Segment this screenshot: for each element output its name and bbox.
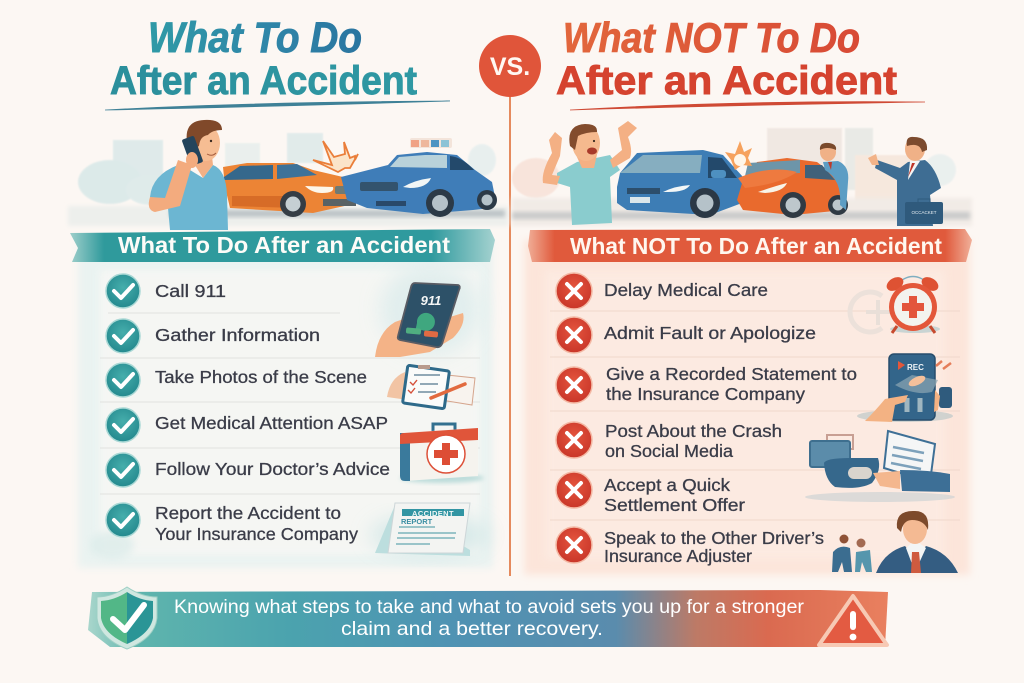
item: get medical attention (106, 408, 388, 442)
icon: accident report: REPORT (401, 517, 433, 526)
scene: driver calling after collision (68, 120, 508, 230)
row dividers (100, 311, 960, 520)
scene: what not to do at the crash (512, 121, 972, 226)
title: what not to do: After an Accident (556, 59, 897, 103)
big adjuster with briefcase (868, 137, 943, 226)
checklist: what not to do (556, 273, 857, 566)
icon: hand recording on phone: REC (907, 363, 924, 372)
item: admit fault: Admit Fault or Apologize (604, 323, 816, 343)
man throwing hands up (543, 121, 637, 225)
footer text (174, 596, 805, 640)
crash starburst (313, 141, 358, 172)
item: report the accident: Report the Accident to (155, 503, 341, 523)
item: recorded statement (556, 364, 857, 404)
item: other driver's adjuster: Speak to the Other Driver’s (604, 528, 824, 548)
road (512, 198, 972, 226)
faded background buildings (512, 128, 956, 203)
banner: what not to do: What NOT To Do After an Accident (570, 233, 942, 259)
item: gather information: Gather Information (155, 325, 320, 345)
icon: accident report (375, 503, 470, 556)
footer banner (88, 587, 888, 649)
footer text: Knowing what steps to take and what to avoid sets you up for a stronger (174, 596, 805, 618)
icon: shield (97, 587, 157, 649)
item: call 911 (106, 274, 226, 308)
item: take photos (106, 363, 367, 397)
item: delay medical care: Delay Medical Care (604, 280, 768, 300)
icon: hand recording on phone (857, 354, 953, 422)
icon: clipboard with pen (387, 365, 475, 409)
item: post about crash: on Social Media (605, 441, 733, 461)
title: what to do (105, 14, 450, 110)
vs badge: VS. (490, 53, 530, 81)
item: call 911: Call 911 (155, 281, 226, 301)
icon: alarm clock (850, 274, 941, 333)
vs badge (479, 35, 541, 97)
crash starburst (725, 141, 752, 170)
title: what to do: After an Accident (110, 59, 417, 103)
item: take photos: Take Photos of the Scene (155, 367, 367, 387)
checklist: what to do (106, 274, 390, 544)
center divider (509, 96, 511, 576)
blue car (341, 152, 497, 217)
item: recorded statement: Give a Recorded Statement to (606, 364, 857, 384)
icon: hand holding 911 phone: 911 (421, 293, 441, 308)
briefcase: OCCACKET (911, 210, 937, 215)
panel: left list background (78, 242, 493, 568)
title: what not to do (556, 14, 925, 110)
icon: accident report: ACCIDENT (412, 509, 454, 518)
icon: smiling insurance adjuster (832, 511, 958, 573)
orange car (223, 163, 362, 217)
title underline (570, 102, 925, 110)
icon: camera and social post (805, 431, 955, 502)
item: other driver's adjuster: Insurance Adjuster (604, 546, 752, 566)
item: report the accident (106, 503, 358, 544)
item: follow doctor's advice: Follow Your Doctor’s Advice (155, 459, 390, 479)
panel: right list background (524, 240, 970, 575)
icon: first aid kit (400, 424, 484, 483)
two small people (832, 534, 872, 572)
item: admit fault (556, 317, 816, 353)
man on phone (149, 120, 228, 230)
item: post about crash (556, 421, 782, 461)
item: post about crash: Post About the Crash (605, 421, 782, 441)
title: what to do: What To Do (148, 14, 362, 62)
light bar (410, 138, 452, 148)
item: report the accident: Your Insurance Company (155, 524, 358, 544)
icon: warning triangle (819, 596, 887, 645)
item: follow doctor's advice (106, 453, 390, 487)
item: get medical attention: Get Medical Attention ASAP (155, 413, 388, 433)
title underline (105, 101, 450, 110)
banner: what to do: What To Do After an Accident (118, 232, 450, 258)
blue car (617, 150, 743, 218)
road (68, 206, 508, 226)
icon: hand holding 911 phone (375, 283, 464, 357)
footer text: claim and a better recovery. (341, 618, 603, 640)
banner: what not to do (528, 229, 972, 262)
item: recorded statement: the Insurance Company (606, 384, 805, 404)
item: quick settlement (556, 472, 745, 515)
banner: what to do (70, 229, 495, 262)
faded background buildings (78, 133, 496, 205)
title: what not to do: What NOT To Do (563, 14, 860, 61)
item: delay medical care (556, 273, 768, 309)
item: other driver's adjuster (556, 527, 824, 566)
orange car (737, 158, 848, 218)
item: quick settlement: Accept a Quick (604, 475, 730, 495)
item: quick settlement: Settlement Offer (604, 495, 745, 515)
small adjuster (820, 143, 848, 210)
item: gather information (106, 319, 320, 353)
